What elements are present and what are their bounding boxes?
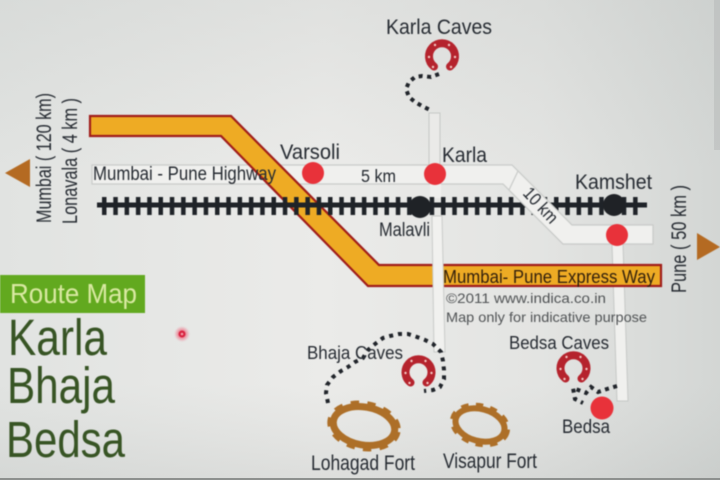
trail: Bedsa Caves	[573, 386, 617, 403]
label: Mumbai-Pune highway: Mumbai - Pune Highway	[93, 164, 276, 185]
station: Kamshet road marker	[606, 224, 628, 246]
road: Kamshet to Bedsa	[612, 244, 628, 401]
title: Karla Bhaja Bedsa: Bedsa	[6, 411, 126, 468]
label: Bhaja Caves: Bhaja Caves	[307, 342, 403, 363]
label: Varsoli: Varsoli	[280, 141, 340, 164]
icon: Bedsa Caves horseshoe	[559, 355, 588, 380]
label: Karla: Karla	[442, 144, 487, 167]
road: Karla lower branch stub	[430, 184, 441, 198]
label: Mumbai-Pune Express Way: Mumbai- Pune Express Way	[443, 267, 655, 287]
label: Malavli: Malavli	[379, 220, 430, 241]
rail station: Kamshet	[603, 194, 625, 216]
title: Karla Bhaja Bedsa	[6, 309, 126, 468]
road: Karla upper branch	[429, 113, 440, 166]
road: Karla to Bhaja	[432, 216, 445, 352]
arrow: towards Mumbai	[5, 159, 30, 187]
highway diagonal over railway	[509, 171, 653, 244]
station: Varsoli marker	[302, 162, 324, 184]
icon: Visapur Fort	[449, 401, 511, 449]
disclaimer note: Map only for indicative purpose	[446, 309, 647, 325]
title: Karla Bhaja Bedsa: Karla	[8, 309, 108, 366]
railway line	[97, 197, 647, 215]
expressway	[90, 116, 661, 286]
label: Karla Caves: Karla Caves	[386, 16, 492, 39]
laser pointer dot	[174, 326, 190, 342]
station: Bedsa marker	[590, 396, 614, 420]
label: Visapur Fort: Visapur Fort	[443, 450, 537, 473]
label: Mumbai distance: Mumbai ( 120 km)	[33, 93, 56, 223]
title: Karla Bhaja Bedsa: Bhaja	[7, 357, 116, 414]
label: distance 5 km: 5 km	[361, 166, 396, 186]
icon: Karla Caves horseshoe	[428, 43, 456, 68]
icon: Bhaja Caves horseshoe	[404, 359, 433, 384]
label: Lohagad Fort: Lohagad Fort	[311, 452, 415, 475]
station: Karla marker	[424, 163, 446, 185]
label: Bedsa Caves: Bedsa Caves	[509, 332, 609, 353]
road: Mumbai-Pune Highway	[92, 165, 653, 244]
label: distance 10 km: 10 km	[519, 183, 562, 227]
label: Lonavala distance: Lonavala ( 4 km )	[59, 98, 82, 224]
arrow: towards Pune	[697, 233, 720, 260]
label: Bedsa: Bedsa	[562, 417, 610, 438]
icon: Lohagad Fort	[328, 400, 400, 452]
panel: Route Map badge: Route Map	[10, 278, 137, 309]
label: Kamshet: Kamshet	[575, 171, 652, 194]
trail: Bhaja Caves	[326, 334, 444, 403]
rail station: Malavli	[409, 196, 431, 218]
trail: Karla Caves	[406, 74, 439, 110]
label: Pune distance: Pune ( 50 km )	[668, 185, 691, 293]
copyright note: ©2011 www.indica.co.in	[446, 290, 606, 306]
